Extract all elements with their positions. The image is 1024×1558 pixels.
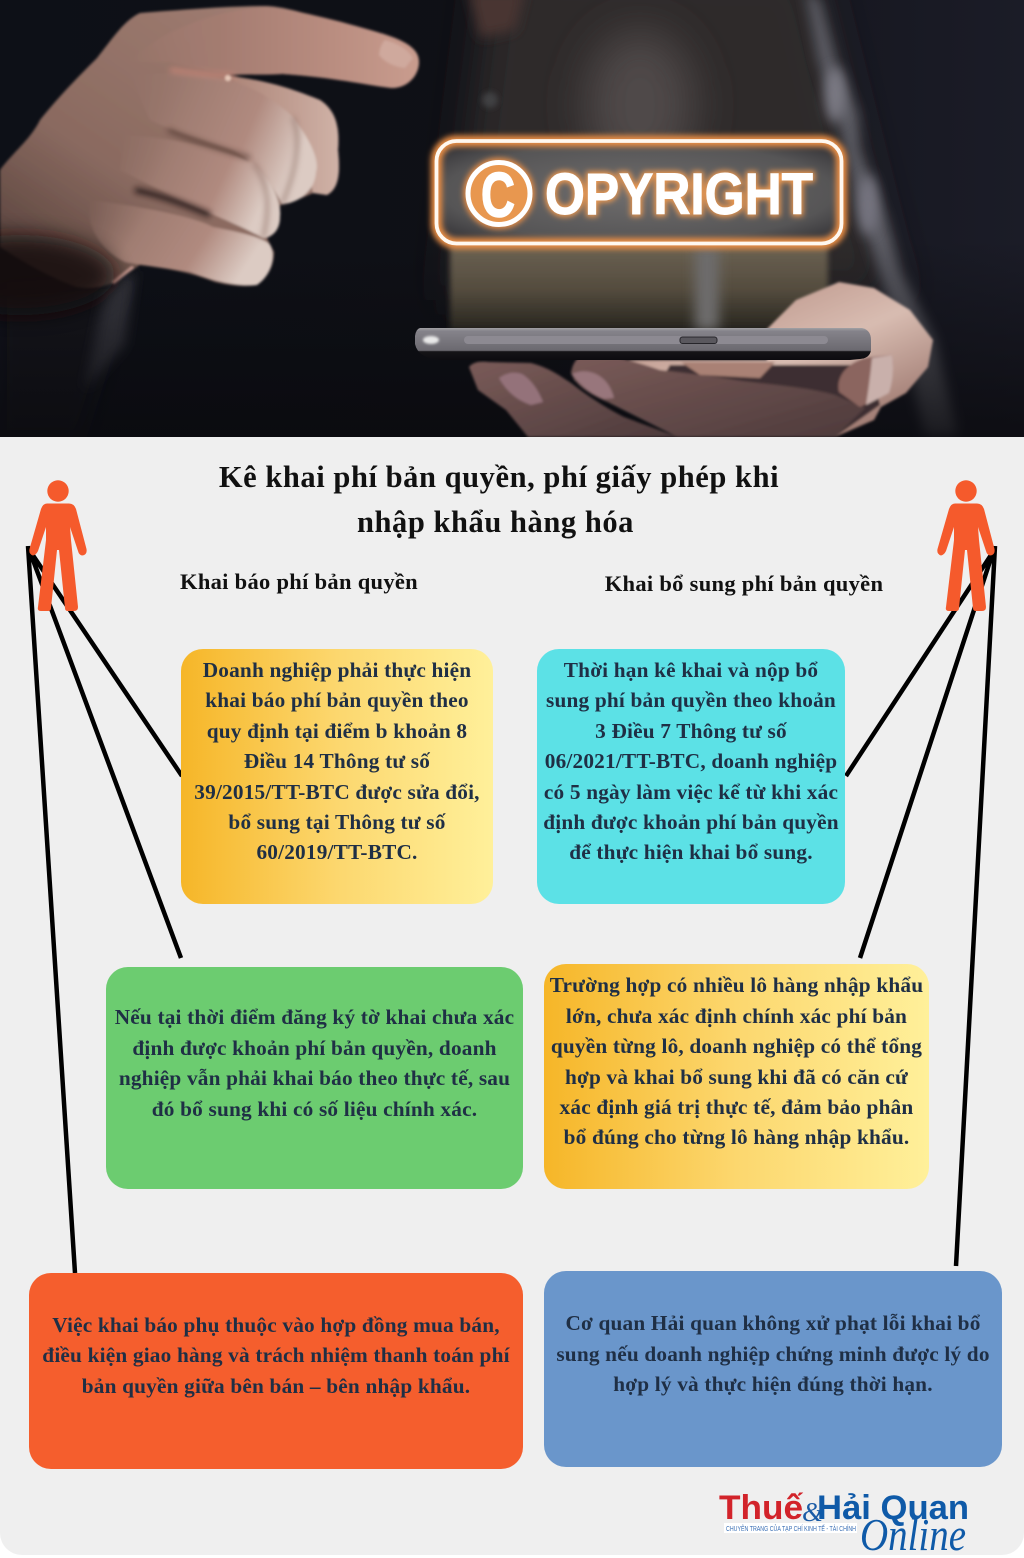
logo: Hải Quan — [817, 1489, 969, 1527]
card: declaration rule — [181, 649, 493, 904]
card: customs no penalty: hợp lý và thực hiện đúng thời hạn. — [613, 1372, 933, 1396]
card: declaration rule: khai báo phí bản quyền theo — [205, 688, 469, 712]
card: customs no penalty — [544, 1271, 1002, 1467]
logo: & — [802, 1497, 823, 1527]
card: many shipments: hợp và khai bổ sung khi đã có căn cứ — [565, 1065, 908, 1089]
photo background — [0, 0, 1024, 437]
card: contract dependency — [29, 1273, 523, 1469]
card: supplementary deadline: để thực hiện khai bổ sung. — [569, 840, 813, 864]
card: contract dependency: điều kiện giao hàng và trách nhiệm thanh toán phí — [42, 1343, 510, 1367]
card: supplementary deadline: 3 Điều 7 Thông tư số — [595, 719, 787, 743]
card: supplementary deadline: định được khoản phí bản quyền — [543, 810, 839, 834]
card: declaration rule: Điều 14 Thông tư số — [244, 749, 430, 773]
card: declaration rule: 39/2015/TT-BTC được sửa đổi, — [194, 780, 480, 804]
card: many shipments: Trường hợp có nhiều lô hàng nhập khẩu — [550, 973, 923, 997]
card: declaration rule: 60/2019/TT-BTC. — [256, 840, 418, 864]
copyright sign: OPYRIGHT — [545, 162, 813, 227]
torso shading — [0, 0, 1024, 437]
icon: person left — [29, 480, 87, 611]
card: contract dependency: Việc khai báo phụ thuộc vào hợp đồng mua bán, — [52, 1313, 500, 1337]
card: customs no penalty: Cơ quan Hải quan không xử phạt lỗi khai bổ — [565, 1311, 981, 1335]
card: supplementary deadline: có 5 ngày làm việc kể từ khi xác — [544, 780, 838, 804]
hand shadow — [0, 235, 115, 315]
card: supplementary deadline: Thời hạn kê khai và nộp bổ — [564, 658, 818, 682]
hero photo: hands holding a phone with glowing copyright sign — [0, 0, 1024, 437]
projected light — [450, 240, 828, 330]
left column heading: Khai báo phí bản quyền — [180, 569, 418, 594]
icon: person right — [937, 480, 995, 611]
card: supplementary deadline: sung phí bản quyền theo khoản — [546, 688, 836, 712]
card: declaration rule: bổ sung tại Thông tư số — [228, 810, 446, 834]
card: customs no penalty: sung nếu doanh nghiệp chứng minh được lý do — [556, 1342, 990, 1366]
card: unknown fee at registration: định được khoản phí bản quyền, doanh — [132, 1036, 497, 1060]
copyright sign: OPYRIGHT — [545, 162, 813, 227]
card: many shipments: lớn, chưa xác định chính xác phí bản — [566, 1004, 907, 1028]
title: Kê khai phí bản quyền, phí giấy phép khi — [219, 460, 779, 494]
logo: CHUYÊN TRANG CỦA TẠP CHÍ KINH TẾ - TÀI CHÍNH — [726, 1523, 856, 1533]
card: supplementary deadline — [537, 649, 845, 904]
logo: Thuế — [719, 1489, 803, 1527]
card: many shipments: xác định giá trị thực tế, đảm bảo phân — [560, 1095, 913, 1119]
card: declaration rule: Doanh nghiệp phải thực hiện — [203, 658, 471, 682]
card: supplementary deadline: 06/2021/TT-BTC, doanh nghiệp — [545, 749, 837, 773]
title — [219, 460, 779, 539]
pointing hand — [0, 6, 419, 288]
title: nhập khẩu hàng hóa — [357, 505, 634, 539]
card: unknown fee at registration: đó bổ sung khi có số liệu chính xác. — [152, 1097, 477, 1121]
copyright sign — [436, 141, 842, 244]
card: many shipments: quyền từng lô, doanh nghiệp có thể tổng — [551, 1034, 922, 1058]
card: many shipments — [544, 964, 929, 1189]
card: declaration rule: quy định tại điểm b khoản 8 — [207, 719, 467, 743]
card: unknown fee at registration: nghiệp vẫn phải khai báo theo thực tế, sau — [119, 1066, 510, 1090]
logo — [719, 1489, 969, 1558]
card: unknown fee at registration: Nếu tại thời điểm đăng ký tờ khai chưa xác — [115, 1005, 514, 1029]
card: unknown fee at registration — [106, 967, 523, 1189]
card: many shipments: bổ đúng cho từng lô hàng nhập khẩu. — [564, 1125, 909, 1149]
copyright sign: C — [481, 160, 515, 230]
phone — [415, 328, 871, 360]
card: contract dependency: bản quyền giữa bên bán – bên nhập khẩu. — [82, 1374, 470, 1398]
phone holding hand — [469, 282, 933, 437]
right column heading: Khai bổ sung phí bản quyền — [605, 571, 883, 596]
